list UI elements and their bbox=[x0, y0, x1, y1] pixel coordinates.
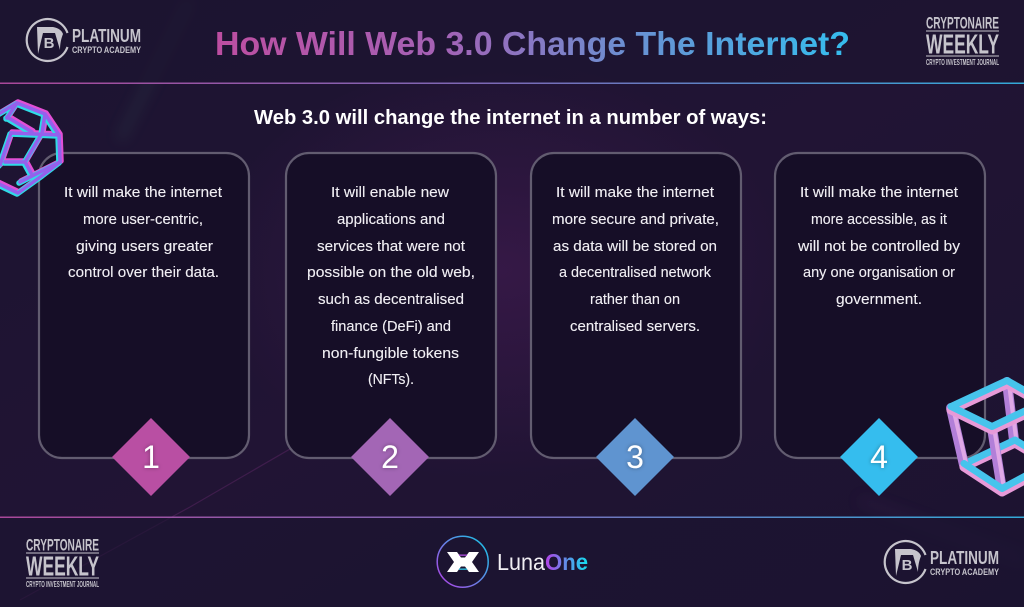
card 2 text: finance (DeFi) and bbox=[331, 318, 451, 335]
badge 4: 4 bbox=[870, 439, 888, 475]
card 2 text bbox=[307, 184, 475, 388]
title: How Will Web 3.0 Change The Internet? bbox=[215, 25, 850, 62]
logo: Cryptonaire Weekly (bottom left): CRYPTO INVESTMENT JOURNAL bbox=[26, 579, 99, 589]
card 1 text: giving users greater bbox=[76, 238, 213, 255]
card 2 text: (NFTs). bbox=[368, 371, 414, 388]
badge 3 bbox=[596, 418, 674, 496]
card 4 text bbox=[797, 184, 961, 308]
panel: card 1 bbox=[39, 153, 249, 496]
header divider line bbox=[0, 82, 1024, 84]
panel: card 4 bbox=[775, 153, 985, 496]
footer divider line bbox=[0, 516, 1024, 518]
badge 3: 3 bbox=[626, 439, 644, 475]
logo: Platinum Crypto Academy (bottom right): PLATINUM bbox=[930, 548, 999, 568]
card 3 text: as data will be stored on bbox=[553, 238, 717, 255]
card 1 text: It will make the internet bbox=[64, 184, 223, 201]
badge 4 bbox=[840, 418, 918, 496]
card 2 text: It will enable new bbox=[331, 184, 449, 201]
card 3 text: rather than on bbox=[590, 291, 680, 308]
card 4 text: It will make the internet bbox=[800, 184, 959, 201]
logo: Platinum Crypto Academy (bottom right): CRYPTO ACADEMY bbox=[930, 567, 1000, 578]
logo: Cryptonaire Weekly (bottom left): WEEKLY bbox=[26, 550, 99, 582]
card 3 text: more secure and private, bbox=[552, 211, 719, 228]
card 3 text: centralised servers. bbox=[570, 318, 700, 335]
logo: LunaOne: Luna bbox=[497, 549, 545, 575]
panel: card 2 bbox=[286, 153, 496, 496]
card 2 text: non-fungible tokens bbox=[322, 345, 459, 362]
card 1 text: more user-centric, bbox=[83, 211, 203, 228]
card 4 text: any one organisation or bbox=[803, 264, 955, 281]
logo: Platinum Crypto Academy (bottom right): B bbox=[902, 557, 913, 574]
logo: Platinum Crypto Academy (top left): PLATINUM bbox=[72, 26, 141, 46]
card 2 text: services that were not bbox=[317, 238, 466, 255]
card 3 text bbox=[552, 184, 719, 335]
card 1 text: control over their data. bbox=[68, 264, 219, 281]
card 3 text: It will make the internet bbox=[556, 184, 715, 201]
logo: LunaOne: One bbox=[545, 549, 588, 575]
logo: Platinum Crypto Academy (bottom right) bbox=[885, 541, 1000, 583]
logo: Platinum Crypto Academy (top left) bbox=[27, 19, 142, 61]
badge 1: 1 bbox=[142, 439, 160, 475]
icon: wireframe cube bbox=[951, 380, 1024, 492]
subheading: Web 3.0 will change the internet in a number of ways: bbox=[254, 107, 767, 129]
panel: card 3 bbox=[531, 153, 741, 496]
logo: Platinum Crypto Academy (top left): B bbox=[44, 35, 55, 52]
logo: Cryptonaire Weekly (bottom left): CRYPTONAIRE bbox=[26, 536, 99, 554]
logo: Platinum Crypto Academy (top left): CRYPTO ACADEMY bbox=[72, 45, 142, 56]
badge 1 bbox=[112, 418, 190, 496]
card 1 text bbox=[64, 184, 223, 281]
logo: Cryptonaire Weekly (top right) bbox=[926, 14, 999, 67]
icon: dodecahedron bbox=[0, 102, 61, 194]
card 2 text: possible on the old web, bbox=[307, 264, 475, 281]
card 4 text: government. bbox=[836, 291, 922, 308]
card 3 text: a decentralised network bbox=[559, 264, 711, 281]
card 4 text: more accessible, as it bbox=[811, 211, 948, 228]
card 4 text: will not be controlled by bbox=[797, 238, 961, 255]
badge 2: 2 bbox=[381, 439, 399, 475]
card 2 text: such as decentralised bbox=[318, 291, 464, 308]
badge 2 bbox=[351, 418, 429, 496]
logo: LunaOne bbox=[437, 536, 588, 587]
card 2 text: applications and bbox=[337, 211, 445, 228]
logo: Cryptonaire Weekly (bottom left) bbox=[26, 536, 99, 589]
